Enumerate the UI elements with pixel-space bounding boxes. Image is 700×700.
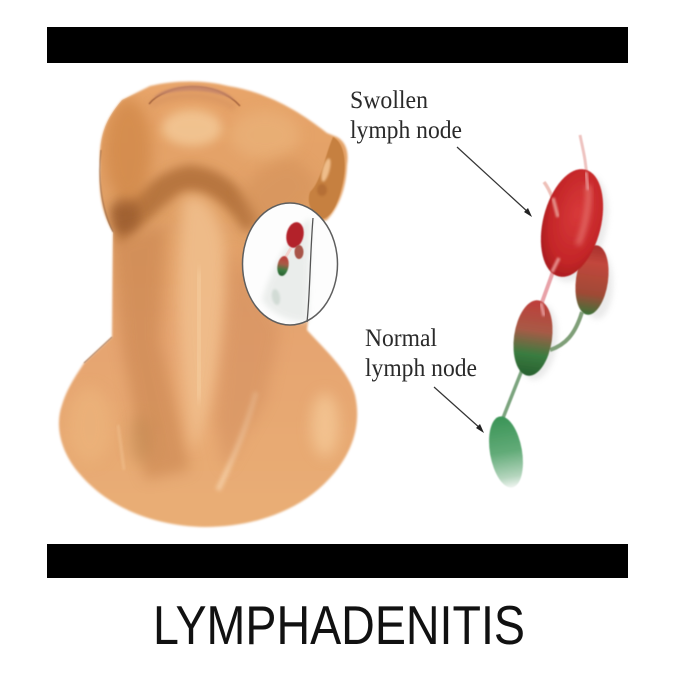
lip shading — [153, 86, 235, 100]
highlight: ear inner — [320, 158, 332, 182]
label: normal lymph node: lymph node — [365, 355, 477, 382]
highlight: swollen node — [578, 185, 589, 245]
highlight: collar tendon — [118, 425, 124, 470]
vessel overlay: bottom on swollen — [552, 258, 559, 272]
highlight: lower-left shoulder — [81, 398, 99, 418]
inset: swollen node — [284, 221, 306, 249]
vessel: top — [580, 135, 587, 180]
vessel overlay: middle node — [541, 303, 544, 316]
node: normal green — [484, 414, 528, 490]
highlight: right tendon — [218, 392, 256, 490]
title: LYMPHADENITIS — [153, 594, 525, 656]
shading: ear hollow — [317, 184, 327, 196]
inset: small node — [294, 245, 304, 259]
vessel: green lower — [503, 370, 522, 418]
lymph node chain diagram — [484, 135, 618, 490]
highlight: jaw right — [234, 116, 296, 156]
icon: mouth line under chin — [149, 87, 240, 106]
label: swollen lymph node: Swollen — [350, 87, 428, 114]
magnifier circle with inset lymph nodes — [242, 203, 338, 325]
inset: vessel — [285, 248, 291, 258]
infographic — [47, 27, 628, 644]
node: swollen — [531, 163, 613, 283]
node: middle — [509, 298, 557, 378]
highlight: central neck — [178, 196, 226, 452]
top black bar — [47, 27, 628, 63]
highlight: chin — [162, 110, 222, 146]
vessel: green curve — [550, 312, 582, 350]
jaw and shoulder outlines — [84, 150, 113, 363]
vessel overlay: top on swollen — [586, 172, 588, 190]
vessel: upper-left — [544, 182, 558, 217]
soft drop shadow — [514, 168, 618, 382]
arrow: normal lymph node — [434, 387, 484, 433]
label: normal lymph node: Normal — [365, 325, 437, 352]
illustration: neck and jaw — [59, 82, 357, 527]
node: small right — [571, 243, 613, 317]
circle outline — [242, 203, 338, 325]
inset: neck edge line — [307, 218, 313, 322]
arrow: swollen lymph node — [457, 147, 532, 217]
shading: jaw right lower — [247, 164, 308, 220]
bottom black bar — [47, 544, 628, 578]
shading: jaw left side — [104, 98, 152, 202]
label: swollen lymph node: lymph node — [350, 117, 462, 144]
inset: shaded tissue — [262, 218, 311, 322]
vessel overlay: left on swollen — [553, 198, 558, 217]
shading: under-jaw shadow — [112, 165, 262, 245]
inset: normal node — [271, 288, 281, 306]
shading: lower-left collar — [128, 422, 148, 460]
highlight: throat line — [198, 270, 200, 400]
highlight: right shoulder — [311, 393, 339, 457]
inset: middle node — [276, 255, 290, 277]
shading: chin under-lip — [150, 96, 235, 108]
shading: neck right — [216, 271, 276, 464]
shading: neck left — [113, 225, 190, 480]
shading: ear — [309, 137, 345, 219]
vessel: pink connecting to middle node — [541, 258, 558, 305]
shading: jaw left corner — [111, 195, 139, 235]
